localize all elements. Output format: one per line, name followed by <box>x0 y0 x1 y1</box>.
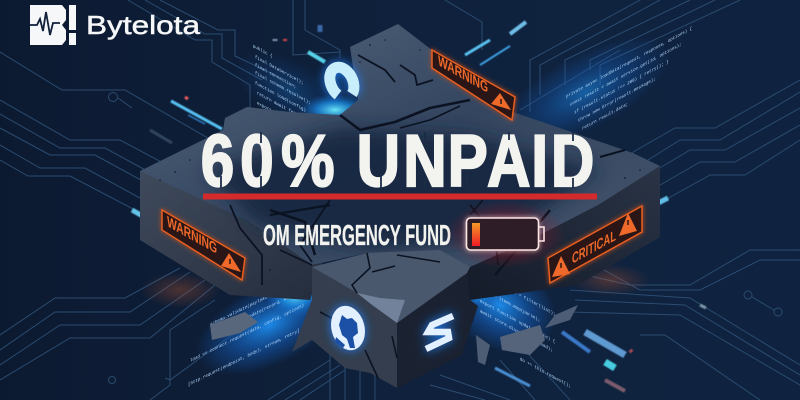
code snippets: final connection; <box>255 62 296 90</box>
cube left face <box>292 267 397 388</box>
logo wordmark: Bytelota <box>86 10 201 40</box>
code snippets: if (result.status !== 200) { retry(); } <box>574 58 669 116</box>
subtitle: OM EMERGENCY FUND <box>263 220 451 252</box>
code snippets: do += this.request(); <box>520 356 571 390</box>
code snippets: const result = await service.get(id, options); <box>570 41 681 108</box>
glowing data bars <box>132 22 706 391</box>
warning sign: top: WARNING <box>438 53 488 97</box>
code snippets: return result.data; <box>582 101 628 132</box>
code snippets: return items.map(parse); <box>482 286 540 324</box>
slab left face <box>140 171 330 300</box>
glow: code lights <box>140 14 687 396</box>
warning sign: left: WARNING <box>167 213 217 258</box>
code snippets: load == connect.request(data, config, options) <box>190 302 304 364</box>
cube cracks <box>320 253 440 378</box>
slab right face <box>450 166 660 300</box>
icon: github logo <box>326 302 370 354</box>
code snippets: export function update(state) { <box>480 298 555 345</box>
stencil gaps <box>221 132 573 188</box>
critical sign: CRITICAL <box>572 227 616 268</box>
slab dark centre <box>205 128 600 250</box>
slab top surface <box>140 24 660 267</box>
code snippets: schema.validate(payload.items, rules) <box>210 277 302 328</box>
code snippets: return await fetch(api.url, key) <box>257 90 335 138</box>
logo <box>30 5 201 45</box>
title <box>201 121 594 202</box>
title: UNPAID <box>357 121 594 202</box>
code snippets: throw new Error(result.message); <box>578 76 656 124</box>
code snippets: await store.dispatch(payload); <box>480 308 553 354</box>
cube top face <box>312 250 470 323</box>
code snippets: final DataService(); <box>255 54 303 86</box>
icon: S logo <box>426 316 453 349</box>
code snippets: private async loadData(request, response, options) { <box>566 25 692 100</box>
rubble <box>210 312 258 340</box>
code snippets: public { <box>253 43 273 60</box>
cube highlight <box>357 293 405 323</box>
slab speckle <box>159 39 641 271</box>
critical sign <box>548 206 642 283</box>
logo mark <box>30 5 66 45</box>
code snippets: function load(config) <box>255 80 306 114</box>
title underline <box>203 194 597 200</box>
cube right face <box>397 273 478 388</box>
code snippets: [http.request(endpoint, body), stream, retry] <box>188 327 300 388</box>
code snippets <box>188 25 692 390</box>
slab cracks <box>230 55 625 285</box>
icon: C ring logo <box>330 67 354 95</box>
code snippets: export const run = async() => { <box>257 100 332 147</box>
cracked slab <box>140 24 660 300</box>
title: 60% <box>201 121 334 202</box>
battery icon <box>445 200 565 268</box>
warning sign: top <box>432 50 515 120</box>
code snippets: await service.update(record, key) <box>212 292 294 338</box>
cube <box>210 250 578 388</box>
code snippets: final schema.resolve(); <box>255 70 311 106</box>
code snippets: const items = filter(list); <box>490 276 555 318</box>
